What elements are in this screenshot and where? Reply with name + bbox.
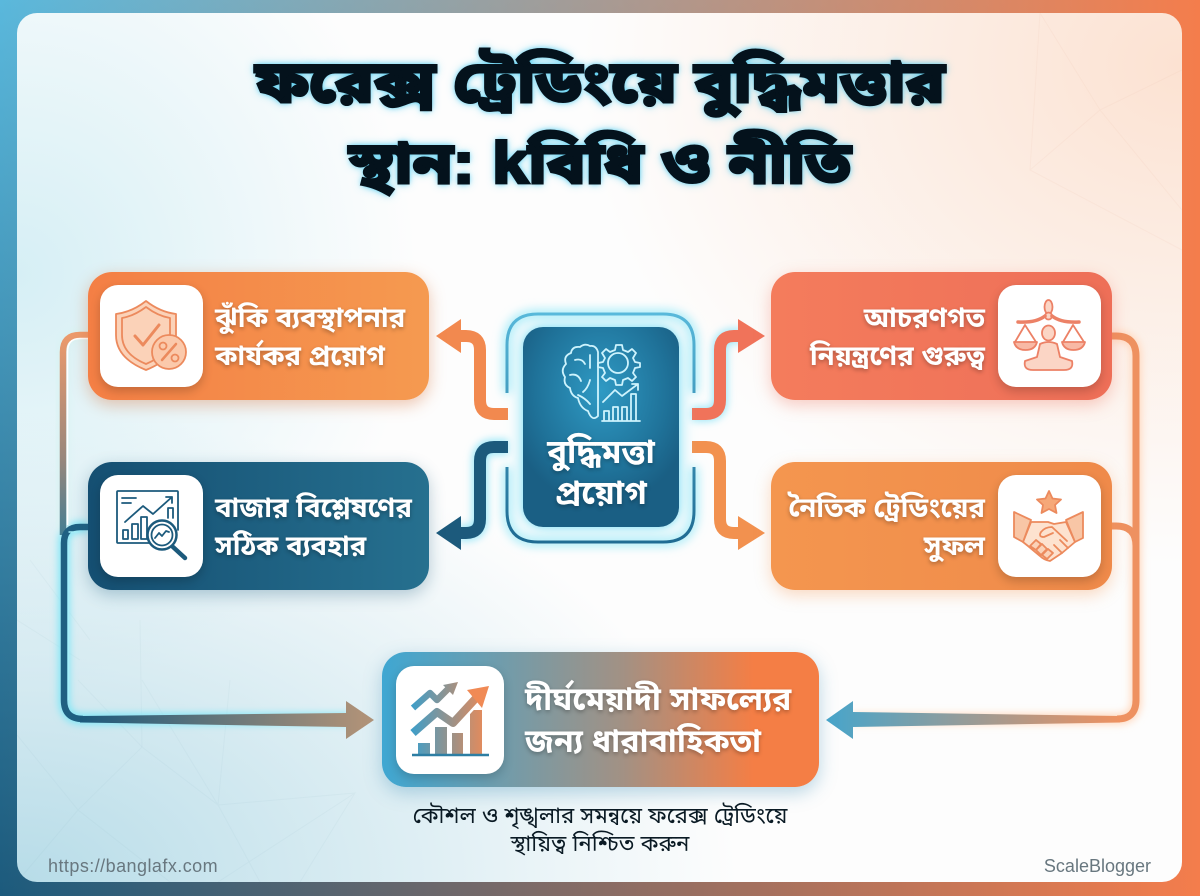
text: নিয়ন্ত্রণের গুরুত্ব (810, 340, 985, 371)
arrow: centre to ethical trading (692, 447, 765, 550)
text: সঠিক ব্যবহার (215, 530, 366, 561)
panel: risk management (88, 272, 429, 400)
text: নৈতিক ট্রেডিংয়ের (788, 492, 985, 523)
arrow: right side loop (826, 336, 1136, 739)
arrow: left side loop (63, 335, 374, 739)
text (786, 492, 987, 566)
icon: growth chart (396, 666, 504, 774)
label: বুদ্ধিমত্তা (547, 433, 655, 470)
text: বাজার বিশ্লেষণের (215, 492, 412, 523)
label: প্রয়োগ (555, 474, 647, 511)
icon: brain gear chart (562, 344, 641, 422)
title: স্থান: kবিধি ও নীতি (349, 131, 851, 196)
title (248, 42, 952, 200)
centre node outline (496, 304, 704, 552)
footer: brand: ScaleBlogger (1044, 856, 1151, 876)
panel: long term success (382, 652, 819, 787)
icon: handshake with star (998, 475, 1101, 577)
text (524, 680, 794, 759)
caption (413, 802, 788, 856)
text: কার্যকর প্রয়োগ (215, 340, 385, 371)
icon: chart with magnifier (100, 475, 203, 577)
text: জন্য ধারাবাহিকতা (525, 723, 761, 759)
text: আচরণগত (864, 302, 985, 333)
text: সুফল (924, 530, 985, 561)
panel: market analysis (88, 462, 429, 590)
text: দীর্ঘমেয়াদী সাফল্যের (525, 681, 791, 717)
caption: কৌশল ও শৃঙ্খলার সমন্বয়ে ফরেক্স ট্রেডিংয়ে (413, 803, 787, 828)
arrow: centre to market analysis (436, 447, 508, 550)
panel: ethical trading (771, 462, 1112, 590)
icon: shield (100, 285, 203, 387)
caption: স্থায়িত্ব নিশ্চিত করুন (511, 831, 689, 856)
centre node (523, 327, 679, 527)
footer: site url: https://banglafx.com (48, 856, 218, 876)
icon: scales and meditating figure (998, 285, 1101, 387)
panel: behavioural control (771, 272, 1112, 400)
text (808, 302, 987, 374)
title: ফরেক্স ট্রেডিংয়ে বুদ্ধিমত্তার (255, 50, 945, 115)
text (213, 302, 407, 371)
label (546, 432, 656, 511)
text: ঝুঁকি ব্যবস্থাপনার (215, 302, 405, 333)
arrow: centre to behavioural control (692, 319, 765, 414)
text (214, 492, 413, 561)
arrow: centre to risk management (436, 319, 508, 414)
